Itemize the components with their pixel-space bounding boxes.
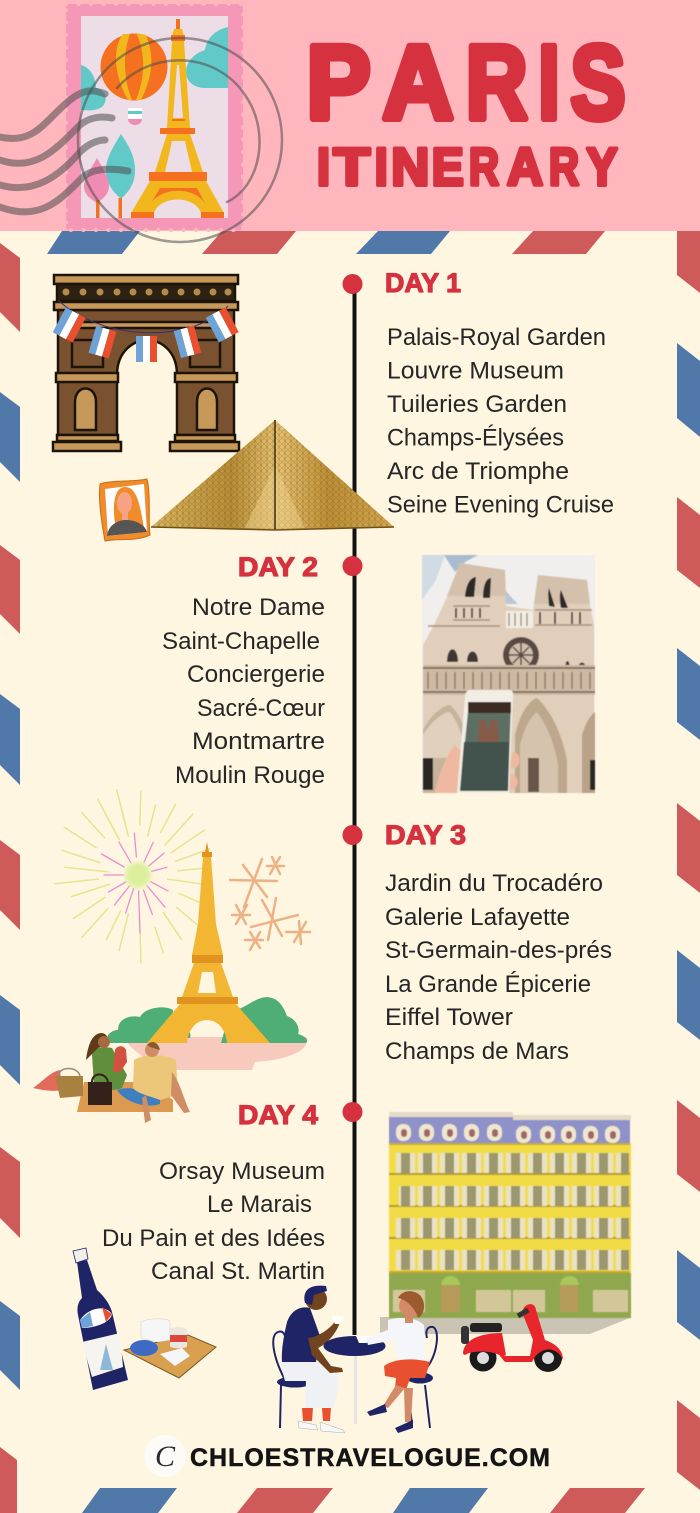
- title: ITINERARY: R: [549, 138, 579, 197]
- day 3 places: Jardin du Trocadéro: [385, 870, 603, 897]
- icon: fireworks: [54, 790, 211, 963]
- day 4 places: Canal St. Martin: [151, 1258, 325, 1285]
- day 2 places: [162, 594, 325, 789]
- day 4 heading: DAY 4: [238, 1100, 318, 1130]
- title: PARIS: A: [382, 24, 454, 142]
- day 1 places: Champs-Élysées: [387, 424, 564, 452]
- footer website: CHLOESTRAVELOGUE.COM: [190, 1444, 550, 1472]
- title: ITINERARY: A: [507, 138, 543, 197]
- title: ITINERARY: N: [391, 138, 429, 197]
- day 3 places: St-Germain-des-prés: [385, 937, 612, 964]
- day 4 places: Du Pain et des Idées: [102, 1225, 325, 1252]
- timeline dot: day 1: [342, 274, 362, 294]
- postmark cancellation: [0, 38, 282, 242]
- title: PARIS: R: [466, 24, 528, 142]
- day 2 places: Saint-Chapelle: [162, 628, 320, 655]
- day 3 places: Eiffel Tower: [385, 1004, 513, 1031]
- day 4 places: Le Marais: [207, 1191, 312, 1218]
- day 3 heading: DAY 3: [385, 820, 466, 850]
- footer logo badge: C: [155, 1440, 176, 1473]
- icon: cheese board: [124, 1319, 216, 1378]
- icon: Louvre pyramid: [151, 420, 394, 530]
- day 4 places: Orsay Museum: [159, 1158, 325, 1185]
- photo: Notre Dame with phone: [422, 555, 595, 793]
- icon: snowflake sparkles: [230, 857, 310, 950]
- day 2 places: Moulin Rouge: [175, 762, 325, 789]
- day 2 places: Conciergerie: [187, 661, 325, 688]
- icon: picnic family: [33, 1033, 190, 1123]
- title: ITINERARY: I: [375, 138, 388, 197]
- icon: couple at cafe table: [273, 1286, 437, 1433]
- icon: bunting flags: [53, 300, 239, 362]
- timeline dot: day 4: [342, 1102, 362, 1122]
- icon: red scooter: [461, 1304, 563, 1372]
- title: PARIS: I: [538, 24, 560, 142]
- day 2 places: Montmartre: [192, 728, 325, 755]
- day 1 places: [387, 324, 614, 518]
- title: ITINERARY: E: [432, 138, 464, 197]
- header band: [0, 0, 700, 231]
- title: ITINERARY: Y: [586, 138, 618, 197]
- postage stamp: [66, 4, 243, 230]
- day 3 places: La Grande Épicerie: [385, 971, 591, 998]
- icon: framed portrait: [99, 479, 150, 541]
- day 1 heading: DAY 1: [385, 268, 461, 298]
- title: ITINERARY: I: [317, 138, 330, 197]
- day 3 places: Champs de Mars: [385, 1038, 569, 1065]
- day 3 places: Galerie Lafayette: [385, 904, 570, 931]
- day 4 places: [102, 1158, 325, 1285]
- day 2 places: Notre Dame: [192, 594, 325, 621]
- hot air balloon: [100, 33, 168, 125]
- day 1 places: Louvre Museum: [387, 358, 564, 384]
- day 3 places: [385, 870, 612, 1065]
- day 2 heading: DAY 2: [238, 552, 318, 582]
- Eiffel Tower: [131, 19, 224, 218]
- timeline line: [352, 284, 356, 1335]
- icon: Arc de Triomphe: [53, 275, 239, 451]
- day 1 places: Seine Evening Cruise: [387, 492, 614, 518]
- day 2 places: Sacré-Cœur: [197, 695, 325, 722]
- day 1 places: Tuileries Garden: [387, 391, 567, 418]
- title: PARIS: [306, 24, 626, 142]
- icon: park with Eiffel Tower: [107, 842, 307, 1070]
- day 1 places: Arc de Triomphe: [387, 458, 569, 485]
- timeline dot: day 3: [342, 825, 362, 845]
- timeline dot: day 2: [342, 556, 362, 576]
- title: ITINERARY: T: [334, 138, 370, 197]
- title: PARIS: S: [570, 24, 626, 142]
- title: PARIS: P: [306, 24, 371, 142]
- icon: wine bottle: [73, 1248, 128, 1390]
- icon: Parisian yellow building: [380, 1112, 632, 1334]
- title: ITINERARY: R: [469, 138, 499, 197]
- footer logo badge: [144, 1435, 186, 1477]
- day 1 places: Palais-Royal Garden: [387, 324, 606, 351]
- teal clouds and trees: [81, 27, 228, 218]
- title: ITINERARY: [317, 138, 618, 197]
